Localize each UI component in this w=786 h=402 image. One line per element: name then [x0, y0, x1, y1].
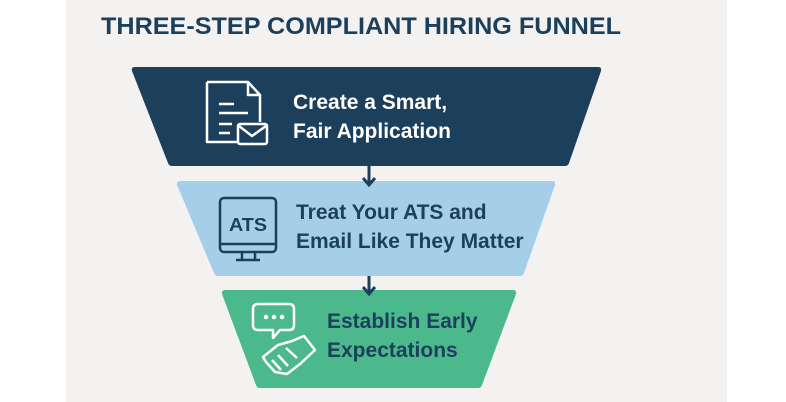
- icon: ATS monitor: ATS: [229, 215, 267, 235]
- text: step 2: Treat Your ATS and: [296, 201, 487, 224]
- arrow 2: [363, 276, 375, 294]
- text: step 1: Fair Application: [293, 120, 451, 143]
- text: step 1: [293, 91, 451, 143]
- text: step 2: Email Like They Matter: [296, 230, 524, 253]
- stage 1 band: [132, 67, 601, 166]
- text: step 3: Expectations: [327, 339, 458, 362]
- arrow 1: [363, 166, 375, 185]
- stage 2 band: [177, 181, 555, 276]
- stage 3 band: [222, 290, 516, 388]
- title: THREE-STEP COMPLIANT HIRING FUNNEL: [101, 13, 621, 40]
- icon: chat bubble and handshake: [253, 304, 315, 374]
- icon: document with envelope: [207, 82, 267, 144]
- text: step 3: Establish Early: [327, 310, 478, 333]
- text: step 1: Create a Smart,: [293, 91, 447, 114]
- text: step 3: [327, 310, 478, 362]
- text: step 2: [296, 201, 524, 253]
- icon: ATS monitor: [220, 198, 276, 260]
